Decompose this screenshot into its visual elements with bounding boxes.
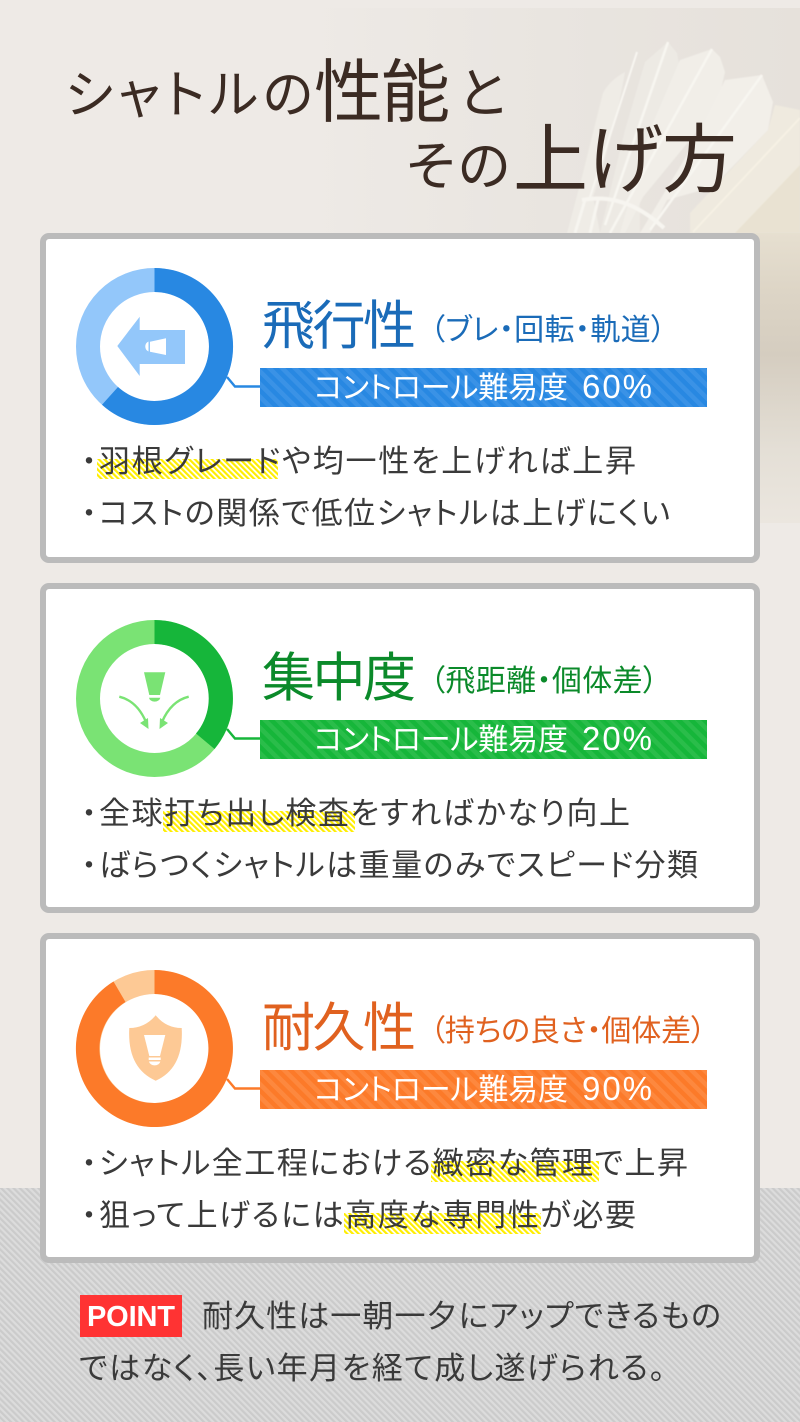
difficulty bar: コントロール難易度 — [314, 1074, 568, 1107]
difficulty bar — [260, 368, 707, 407]
difficulty bar: 60% — [582, 368, 652, 405]
connector — [227, 377, 262, 386]
difficulty bar: コントロール難易度 — [314, 372, 568, 405]
bottom striped band — [0, 1188, 800, 1422]
subheading: （持ちの良さ・個体差） — [430, 1015, 706, 1048]
title: シャトルの — [65, 67, 313, 125]
point badge — [80, 1295, 182, 1337]
panel: concentration — [43, 586, 757, 910]
point badge: POINT — [87, 1301, 175, 1333]
heading: 耐久性 — [262, 999, 416, 1058]
panel frame — [43, 586, 757, 910]
icon: shuttle and converging arrows — [119, 672, 189, 729]
difficulty bar: コントロール難易度 — [314, 724, 568, 757]
subheading: （ブレ・回転・軌道） — [430, 314, 666, 347]
panel: durability — [43, 936, 757, 1260]
icon: arrow with shuttle — [117, 317, 185, 376]
subheading: （飛距離・個体差） — [430, 665, 658, 698]
bullet text: コストの関係で低位シャトルは上げにくい — [99, 496, 670, 531]
panel: flight — [43, 236, 757, 560]
difficulty bar: 90% — [582, 1070, 652, 1107]
difficulty bar: 20% — [582, 720, 652, 757]
bullet text: 狙って上げるには高度な専門性が必要 — [99, 1198, 636, 1233]
title — [65, 54, 737, 202]
donut chart 20% — [88, 620, 233, 765]
icon: shield with shuttle — [129, 1015, 182, 1081]
heading: 集中度 — [262, 649, 416, 708]
point text: 耐久性は一朝一夕にアップできるもの — [202, 1299, 721, 1334]
title: と — [458, 64, 506, 124]
connector — [227, 729, 262, 738]
callout: point: ではなく、長い年月を経て成し遂げられる。 — [79, 1351, 665, 1386]
panel frame — [43, 236, 757, 560]
title: その — [406, 137, 510, 197]
bullet text: ・ — [74, 850, 104, 883]
bullet text: ・ — [74, 446, 104, 479]
bullet text: ばらつくシャトルは重量のみでスピード分類 — [99, 848, 698, 883]
bullet text: ・ — [74, 498, 104, 531]
difficulty bar — [260, 720, 707, 759]
heading: 飛行性 — [262, 297, 416, 356]
bullet text: ・ — [74, 798, 104, 831]
difficulty bar — [260, 1070, 707, 1109]
bullet text — [74, 796, 698, 883]
background photo: shuttlecock feathers — [300, 8, 800, 523]
bullet text: シャトル全工程における緻密な管理で上昇 — [99, 1146, 688, 1181]
title: 性能 — [314, 54, 450, 131]
connector — [227, 1079, 262, 1088]
callout: point — [79, 1295, 721, 1386]
bullet text — [74, 444, 670, 531]
bullet text — [74, 1146, 688, 1234]
donut chart 60% — [88, 268, 233, 425]
donut chart 90% — [76, 970, 233, 1127]
panel frame — [43, 936, 757, 1260]
bullet text: 羽根グレードや均一性を上げれば上昇 — [99, 444, 636, 479]
bullet text: 全球打ち出し検査をすればかなり向上 — [99, 796, 630, 831]
title: 上げ方 — [513, 118, 737, 202]
bullet text: ・ — [74, 1200, 104, 1233]
bullet text: ・ — [74, 1148, 104, 1181]
